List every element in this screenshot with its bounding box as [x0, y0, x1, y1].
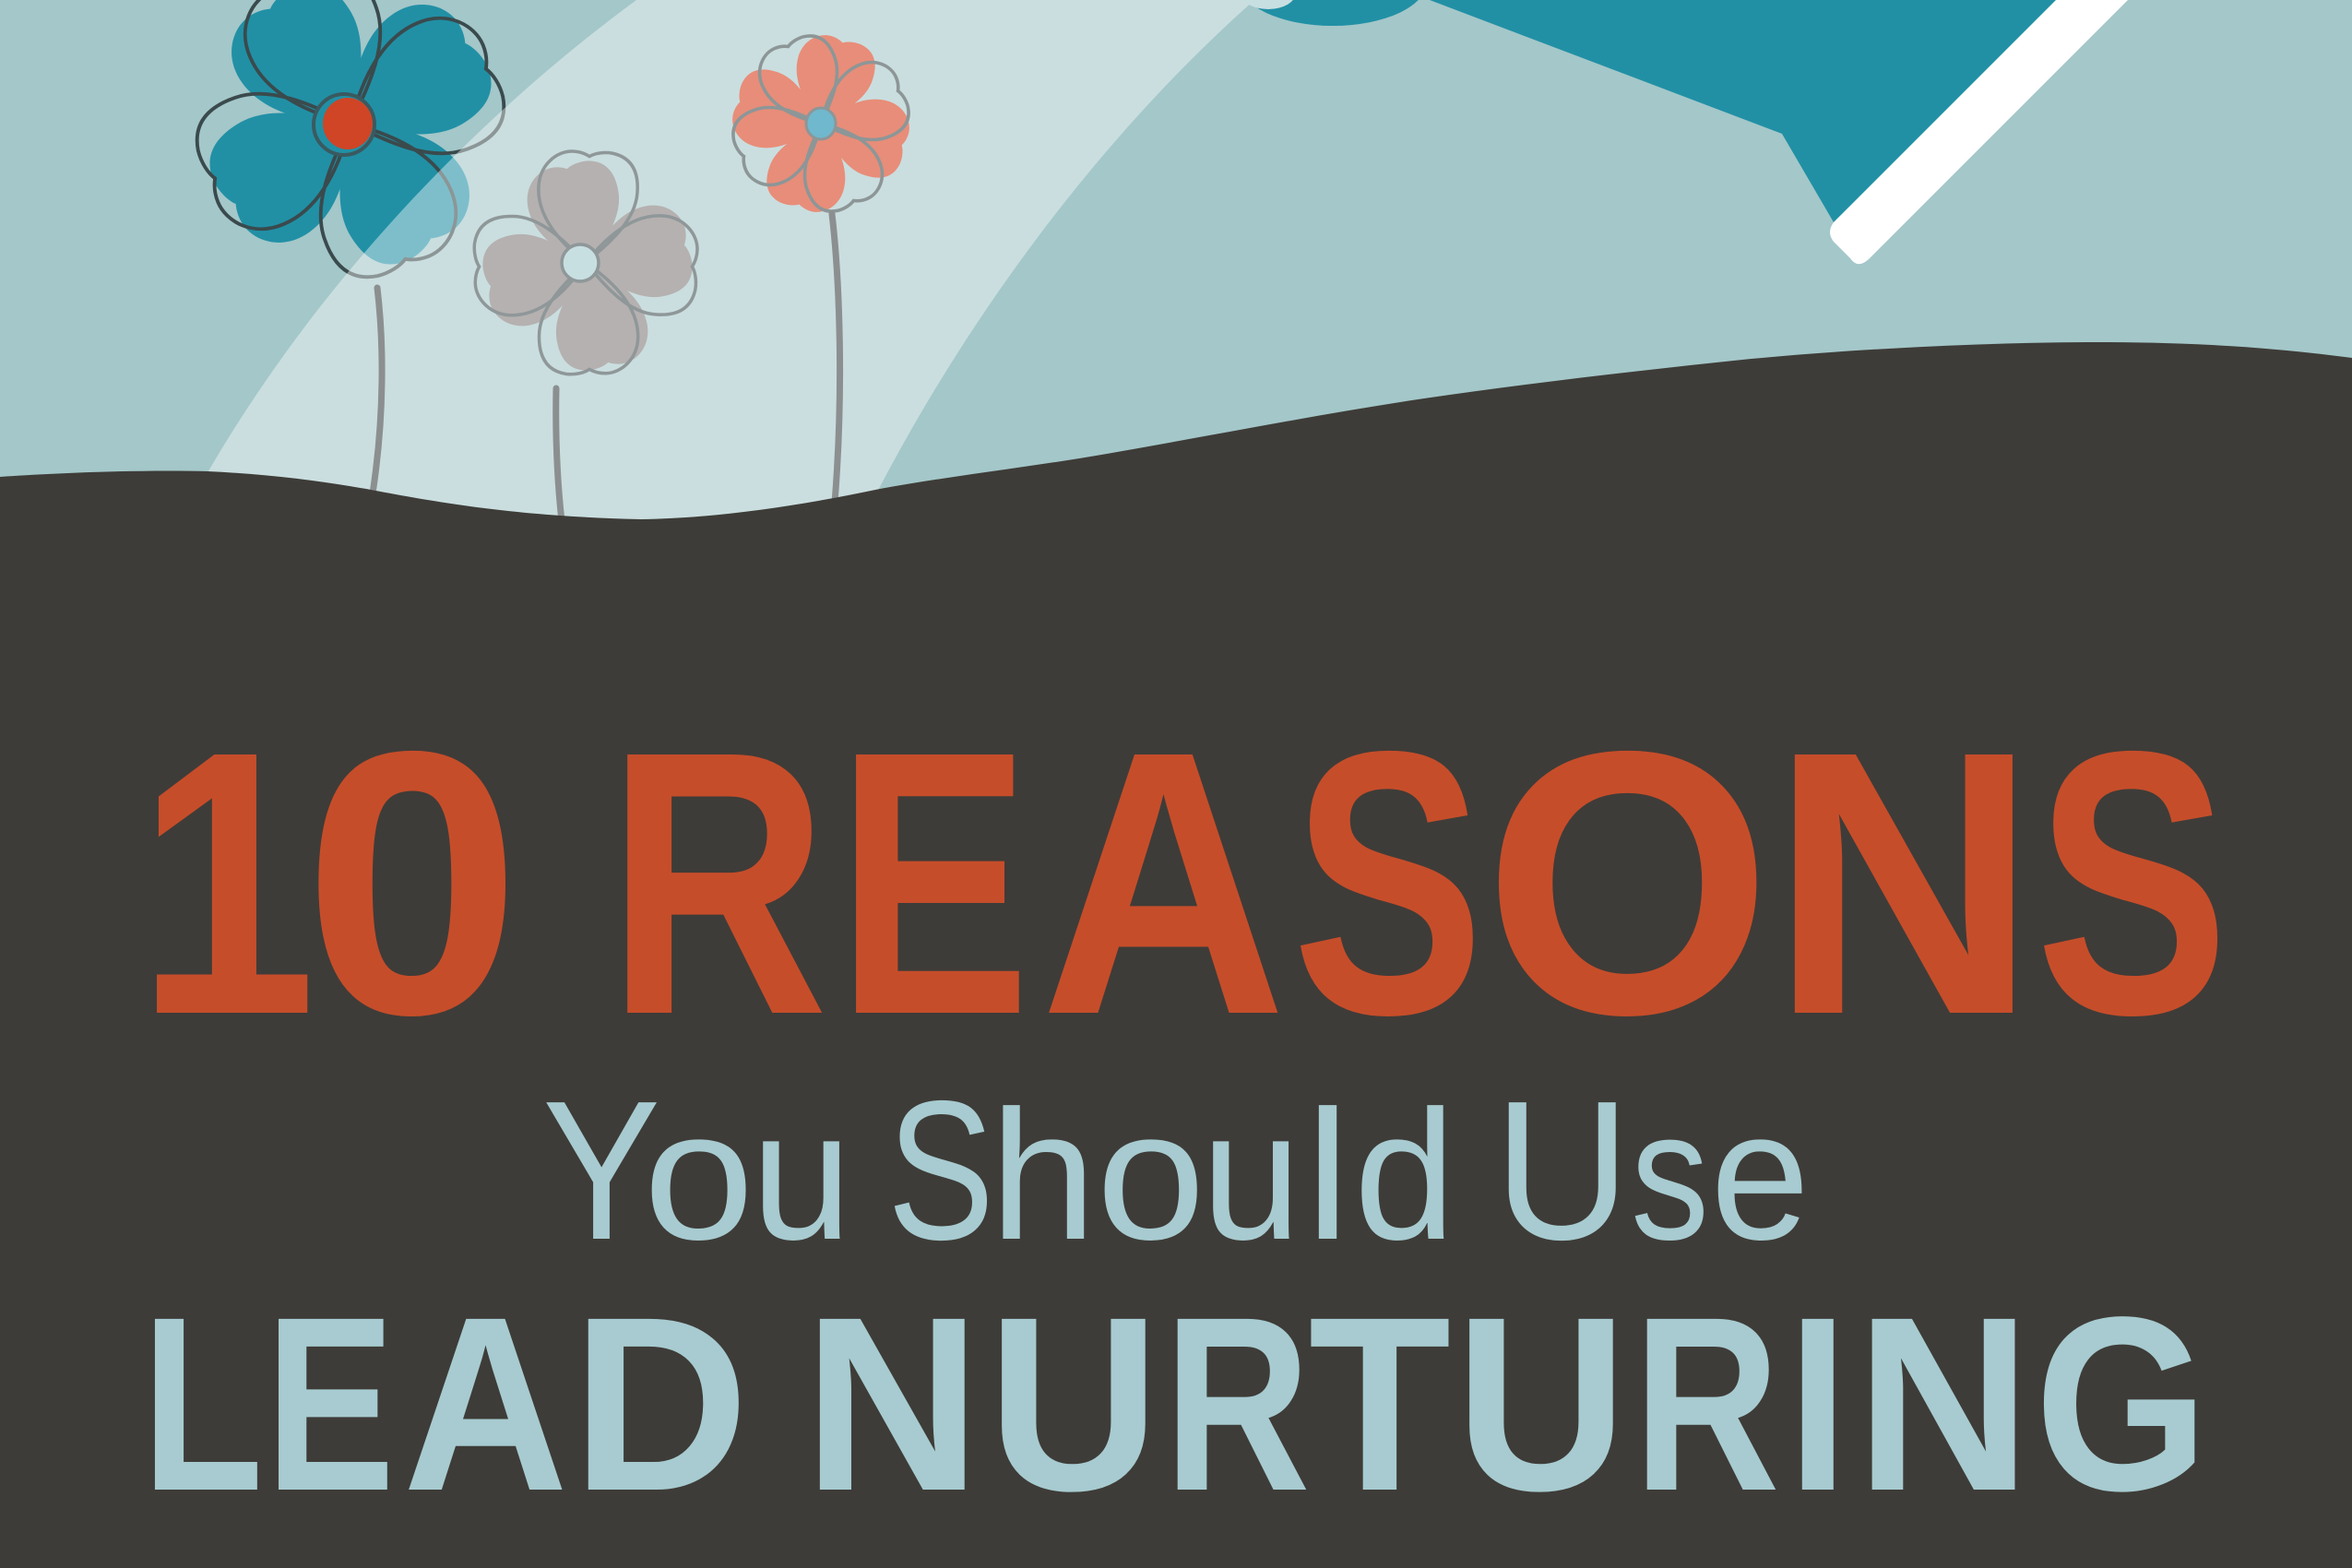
subtitle: You Should Use: Y: [542, 1059, 660, 1281]
title: LEAD NURTURING: U: [988, 1265, 1160, 1543]
sky background: [0, 0, 2352, 646]
subtitle: You Should Use: S: [887, 1059, 994, 1281]
subtitle: You Should Use: s: [1631, 1073, 1709, 1278]
stem: teal flower: [373, 288, 382, 493]
title: LEAD NURTURING: D: [572, 1265, 749, 1543]
title: LEAD NURTURING: R: [1164, 1265, 1311, 1543]
subtitle: You Should Use: u: [1202, 1073, 1301, 1278]
title: LEAD NURTURING: T: [1309, 1265, 1451, 1543]
title: 10 REASONS: O: [1483, 674, 1772, 1093]
beam of water: [198, 0, 1254, 572]
flower: teal: [184, 0, 517, 290]
title: 10 REASONS: S: [2036, 674, 2228, 1093]
title: 10 REASONS: N: [1770, 674, 2037, 1093]
subtitle: You Should Use: u: [751, 1073, 852, 1278]
stem: coral flower: [832, 214, 840, 503]
subtitle: You Should Use: o: [1097, 1073, 1206, 1278]
flower: grey: [473, 150, 698, 376]
stem: grey flower: [556, 388, 562, 521]
flower: coral: [726, 29, 916, 219]
title: LEAD NURTURING: U: [1455, 1265, 1627, 1543]
subtitle: You Should Use: l: [1305, 1073, 1350, 1278]
subtitle: You Should Use: d: [1354, 1073, 1455, 1278]
title: 10 REASONS: 1: [137, 674, 316, 1093]
title: LEAD NURTURING: G: [2035, 1265, 2208, 1543]
subtitle: You Should Use: o: [644, 1073, 754, 1278]
title: 10 REASONS: E: [837, 674, 1030, 1093]
subtitle: You Should Use: U: [1494, 1059, 1631, 1281]
title: LEAD NURTURING: I: [1788, 1265, 1848, 1543]
title: 10 REASONS: R: [607, 674, 828, 1093]
icon: watering can: [1239, 0, 2128, 264]
dark ground: [0, 342, 2352, 1568]
title: LEAD NURTURING: E: [266, 1265, 395, 1543]
subtitle: You Should Use: e: [1710, 1073, 1810, 1278]
title: 10 REASONS: 0: [303, 674, 522, 1093]
title: LEAD NURTURING: N: [803, 1265, 981, 1543]
subtitle: You Should Use: h: [990, 1073, 1097, 1278]
title: LEAD NURTURING: N: [1856, 1265, 2031, 1543]
title: LEAD NURTURING: A: [403, 1265, 568, 1543]
title: LEAD NURTURING: R: [1633, 1265, 1780, 1543]
title: LEAD NURTURING: L: [142, 1265, 264, 1543]
title: 10 REASONS: A: [1040, 674, 1287, 1093]
title: 10 REASONS: S: [1292, 674, 1484, 1093]
